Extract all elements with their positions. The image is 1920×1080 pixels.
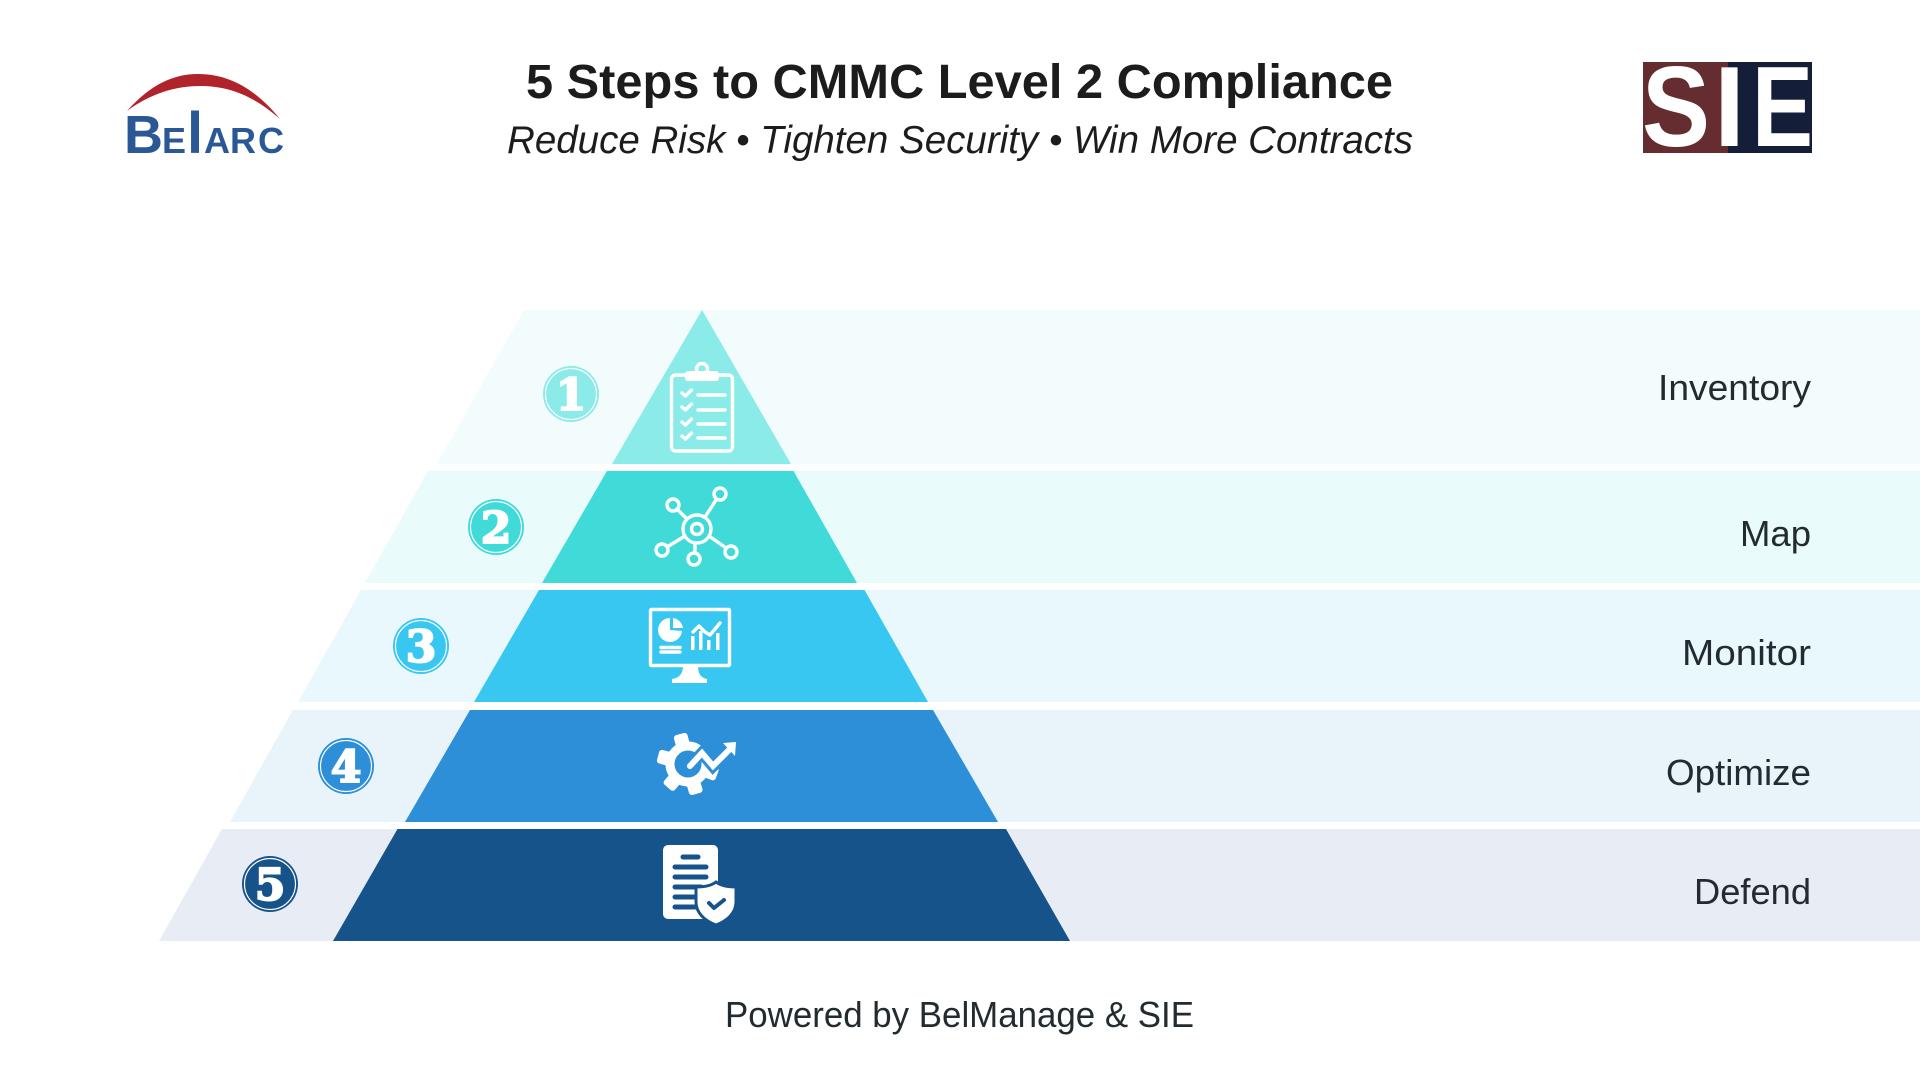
logo: SIE: S [1642, 44, 1710, 171]
label: Map: Map [1740, 513, 1811, 554]
title: 5 Steps to CMMC Level 2 Compliance [526, 56, 1393, 109]
badge 3: 3 [406, 622, 436, 673]
label: Defend: Defend [1694, 871, 1811, 912]
subtitle: Reduce Risk • Tighten Security • Win More Contracts [507, 119, 1413, 162]
badge 5: 5 [255, 860, 285, 911]
pyramid tier 3 [474, 590, 928, 702]
logo: Belarc: l [187, 101, 203, 166]
logo: Belarc: E [162, 120, 186, 161]
logo: SIE [1642, 44, 1813, 171]
icon: network hub [656, 488, 737, 565]
badge 2: 2 [481, 503, 511, 554]
step 1: Inventory [437, 310, 1920, 464]
label: Inventory: Inventory [1658, 367, 1811, 408]
badge 2 [468, 499, 524, 555]
icon: monitor dashboard [650, 610, 730, 683]
pyramid tier 1 [612, 310, 791, 464]
footer: Powered by BelManage & SIE [725, 994, 1194, 1035]
logo: SIE: I [1714, 44, 1745, 171]
step 3: Monitor [298, 590, 1920, 702]
badge 3 [393, 618, 449, 674]
icon: gear with arrow [656, 732, 736, 796]
step 4: Optimize [230, 710, 1920, 822]
logo: Belarc: R [230, 120, 256, 161]
pyramid tier 2 [542, 471, 857, 583]
step 2: Map [365, 471, 1920, 583]
badge 4: 4 [331, 742, 361, 793]
logo: Belarc: A [204, 120, 230, 161]
logo: Belarc [124, 74, 284, 166]
label: Optimize: Optimize [1666, 752, 1811, 793]
logo: Belarc: B [124, 105, 163, 165]
icon: document with shield [663, 845, 736, 925]
icon: clipboard checklist [672, 364, 732, 451]
label: Monitor: Monitor [1682, 632, 1811, 673]
step 5: Defend [159, 829, 1920, 941]
logo: SIE: E [1752, 44, 1813, 171]
pyramid tier 4 [405, 710, 998, 822]
badge 1: 1 [556, 370, 586, 421]
badge 5 [242, 856, 298, 912]
badge 1 [543, 366, 599, 422]
pyramid tier 5 [333, 829, 1070, 941]
logo: Belarc: C [258, 120, 284, 161]
badge 4 [318, 738, 374, 794]
